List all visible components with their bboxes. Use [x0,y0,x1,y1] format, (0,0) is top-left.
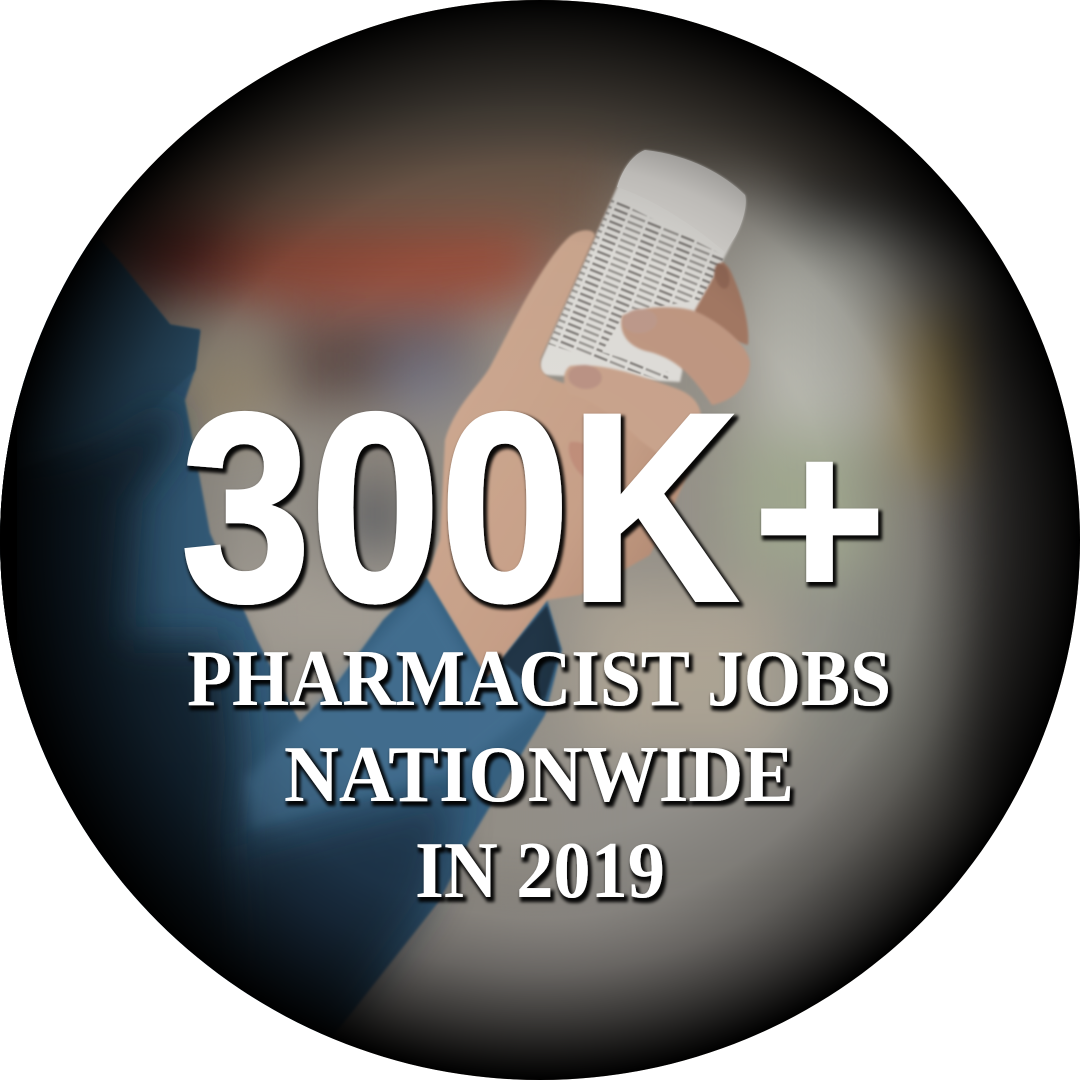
headline: 300K+ [181,357,887,657]
line 2: NATIONWIDE [284,731,794,819]
nails [624,310,655,332]
line 3: IN 2019 [415,827,665,915]
caption: pharmacist jobs nationwide in 2019 [187,635,891,915]
sleeve ruffle [17,240,202,405]
cuff shadow [500,605,560,700]
lower sleeve shadow [235,790,460,1040]
plus sign: + [752,387,887,650]
line 1: PHARMACIST JOBS [187,635,891,723]
cap [617,150,746,252]
bottle [540,150,746,383]
middle finger [621,307,750,405]
lower fingertip [568,442,584,476]
dark fold under ruffle [0,400,245,980]
black edge strip [0,406,17,674]
ring finger [563,364,702,452]
hand behind bottle: far fingers [690,259,748,345]
denim sleeve and arm [0,230,562,1040]
number 300K: 300K [181,357,738,657]
hand holding bottle [427,150,750,677]
palm and thumb [427,230,750,677]
cuff highlight [245,585,545,830]
printed label text [548,198,725,383]
